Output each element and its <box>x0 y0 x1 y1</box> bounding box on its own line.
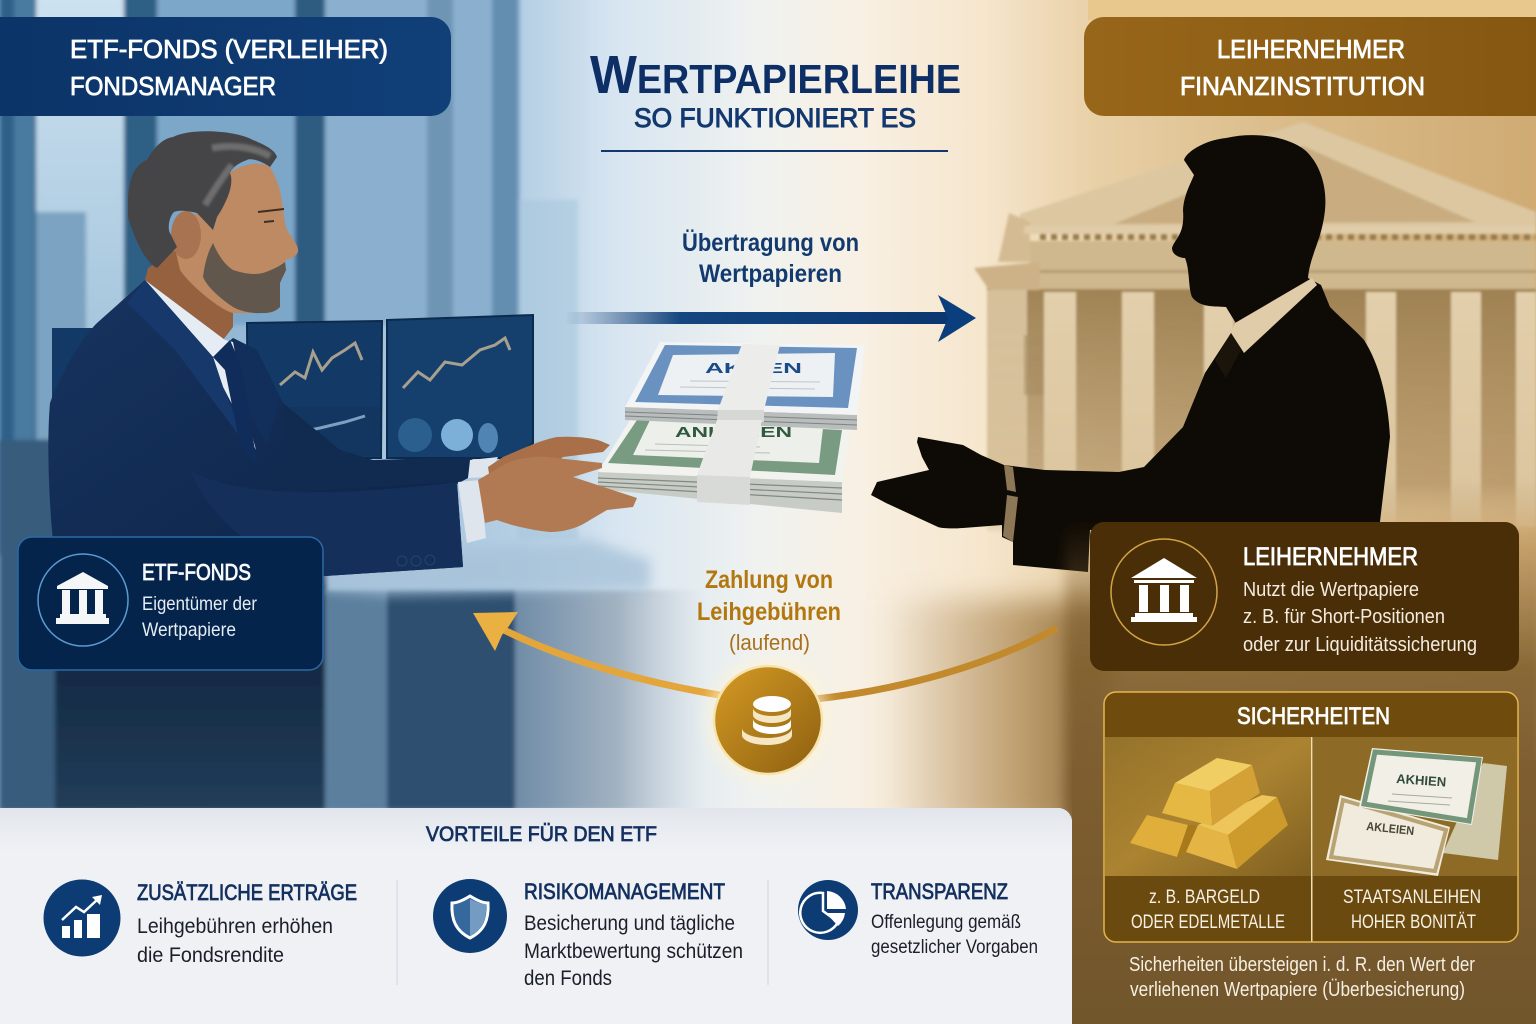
certificates photo tile: AKHIEN <box>1396 771 1447 789</box>
panel: Sicherheiten <box>1104 692 1518 942</box>
panel: Sicherheiten: HOHER BONITÄT <box>1351 912 1476 933</box>
borrower silhouette <box>871 135 1390 572</box>
overcollateralisation note: Sicherheiten übersteigen i. d. R. den Wert der <box>1129 954 1475 976</box>
arrow: fee payment to fund <box>473 612 1057 699</box>
benefit: Zusätzliche Erträge: ZUSÄTZLICHE ERTRÄGE <box>137 880 357 905</box>
sleeve shading <box>190 470 463 576</box>
front cuff <box>458 480 486 543</box>
icon: bank building <box>1111 539 1217 645</box>
icon: coin stack <box>706 658 830 782</box>
label: fee payment: (laufend) <box>729 630 810 655</box>
header: Leihernehmer <box>1084 17 1536 116</box>
arrow: securities to borrower <box>565 295 976 342</box>
hair highlight <box>205 146 270 205</box>
panel: Leihernehmer role: oder zur Liquiditätssicherung <box>1243 634 1477 656</box>
front hand <box>478 457 637 532</box>
gold photo tile <box>1105 737 1311 876</box>
benefit: Transparenz: Offenlegung gemäß <box>871 912 1021 933</box>
title block: WERTPAPIERLEIHE <box>590 45 961 105</box>
upper stack: Aktien <box>625 342 865 430</box>
label: transfer of securities: Übertragung von <box>682 228 859 257</box>
benefit: Risikomanagement: den Fonds <box>524 967 612 990</box>
benefit: Risikomanagement: Besicherung und tägliche <box>524 912 735 935</box>
title block <box>590 45 961 152</box>
header band <box>1104 692 1518 737</box>
label: transfer of securities <box>682 228 859 288</box>
panel heading: VORTEILE FÜR DEN ETF <box>426 823 657 846</box>
benefit: Transparenz: gesetzlicher Vorgaben <box>871 937 1038 958</box>
header: ETF-Fonds <box>0 17 451 116</box>
benefit: Risikomanagement: Marktbewertung schützen <box>524 940 743 963</box>
panel: Sicherheiten: z. B. BARGELD <box>1149 887 1260 908</box>
overcollateralisation note: verliehenen Wertpapiere (Überbesicherung) <box>1130 979 1465 1001</box>
caption band <box>1104 876 1518 942</box>
panel: Vorteile für den ETF <box>0 808 1072 1024</box>
header: Leihernehmer: FINANZINSTITUTION <box>1180 71 1425 101</box>
jacket <box>48 280 463 576</box>
lower stack: Anleihen <box>598 420 850 513</box>
label: fee payment <box>697 566 841 655</box>
benefit: Transparenz <box>798 879 1038 958</box>
panel: Sicherheiten: STAATSANLEIHEN <box>1343 887 1481 908</box>
panel: Leihernehmer role <box>1090 522 1519 671</box>
benefit: Transparenz: TRANSPARENZ <box>871 879 1008 904</box>
sleeve buttons <box>397 555 435 566</box>
label: fee payment: Leihgebühren <box>697 598 841 626</box>
lower office and desk <box>0 440 705 810</box>
back arm and hand <box>283 403 610 505</box>
title block: SO FUNKTIONIERT ES <box>634 103 916 133</box>
lapels <box>127 280 258 470</box>
beard <box>203 243 286 313</box>
collateral frame fill <box>1104 692 1518 942</box>
panel: Leihernehmer role: LEIHERNEHMER <box>1243 543 1418 571</box>
benefit: Risikomanagement: RISIKOMANAGEMENT <box>524 879 725 904</box>
label: fee payment: Zahlung von <box>705 566 833 594</box>
icon: rising bar chart <box>44 880 120 956</box>
neck <box>145 250 233 340</box>
benefit: Zusätzliche Erträge <box>44 880 357 967</box>
bottom right backdrop <box>880 520 1536 1024</box>
tie <box>213 340 258 470</box>
upper stack: Aktien: AKTIEN <box>705 360 802 377</box>
icon: pie chart <box>798 880 858 940</box>
monitors with charts <box>52 315 533 458</box>
benefit: Risikomanagement <box>433 879 743 990</box>
shirt <box>145 280 256 450</box>
panel: ETF-Fonds owner: Wertpapiere <box>142 620 236 641</box>
benefit: Zusätzliche Erträge: Leihgebühren erhöhen <box>137 915 333 938</box>
panel: Sicherheiten: SICHERHEITEN <box>1237 703 1390 730</box>
overcollateralisation note <box>1129 954 1475 1001</box>
ear <box>171 211 201 259</box>
panel: Leihernehmer role: Nutzt die Wertpapiere <box>1243 579 1419 601</box>
tie <box>1215 333 1241 378</box>
hair <box>128 131 277 268</box>
panel: ETF-Fonds owner <box>18 537 323 670</box>
cuffs <box>1003 465 1018 542</box>
panel: Sicherheiten: ODER EDELMETALLE <box>1131 912 1285 933</box>
face <box>172 164 298 313</box>
office windows and skyline <box>0 0 578 555</box>
panel: Leihernehmer role: z. B. für Short-Positionen <box>1243 606 1445 628</box>
header: ETF-Fonds: ETF-FONDS (VERLEIHER) <box>70 34 388 64</box>
panel: ETF-Fonds owner: ETF-FONDS <box>142 559 251 585</box>
label: transfer of securities: Wertpapieren <box>699 260 842 288</box>
lower stack: Anleihen: ANLEIHEN <box>675 424 792 441</box>
header: ETF-Fonds: FONDSMANAGER <box>70 71 276 101</box>
icon: bank building <box>38 554 128 646</box>
temple building <box>974 122 1536 533</box>
icon: shield <box>433 879 507 953</box>
panel: ETF-Fonds owner: Eigentümer der <box>142 594 258 615</box>
shirt collar <box>1231 278 1317 353</box>
fund manager figure <box>48 131 637 576</box>
paper band <box>697 344 780 505</box>
header: Leihernehmer: LEIHERNEHMER <box>1217 34 1405 64</box>
benefit: Zusätzliche Erträge: die Fondsrendite <box>137 944 284 967</box>
certificates photo tile <box>1313 737 1517 876</box>
securities stack <box>598 342 865 513</box>
certificates photo tile: AKLEIEN <box>1366 819 1415 838</box>
brow and eye <box>258 209 284 222</box>
